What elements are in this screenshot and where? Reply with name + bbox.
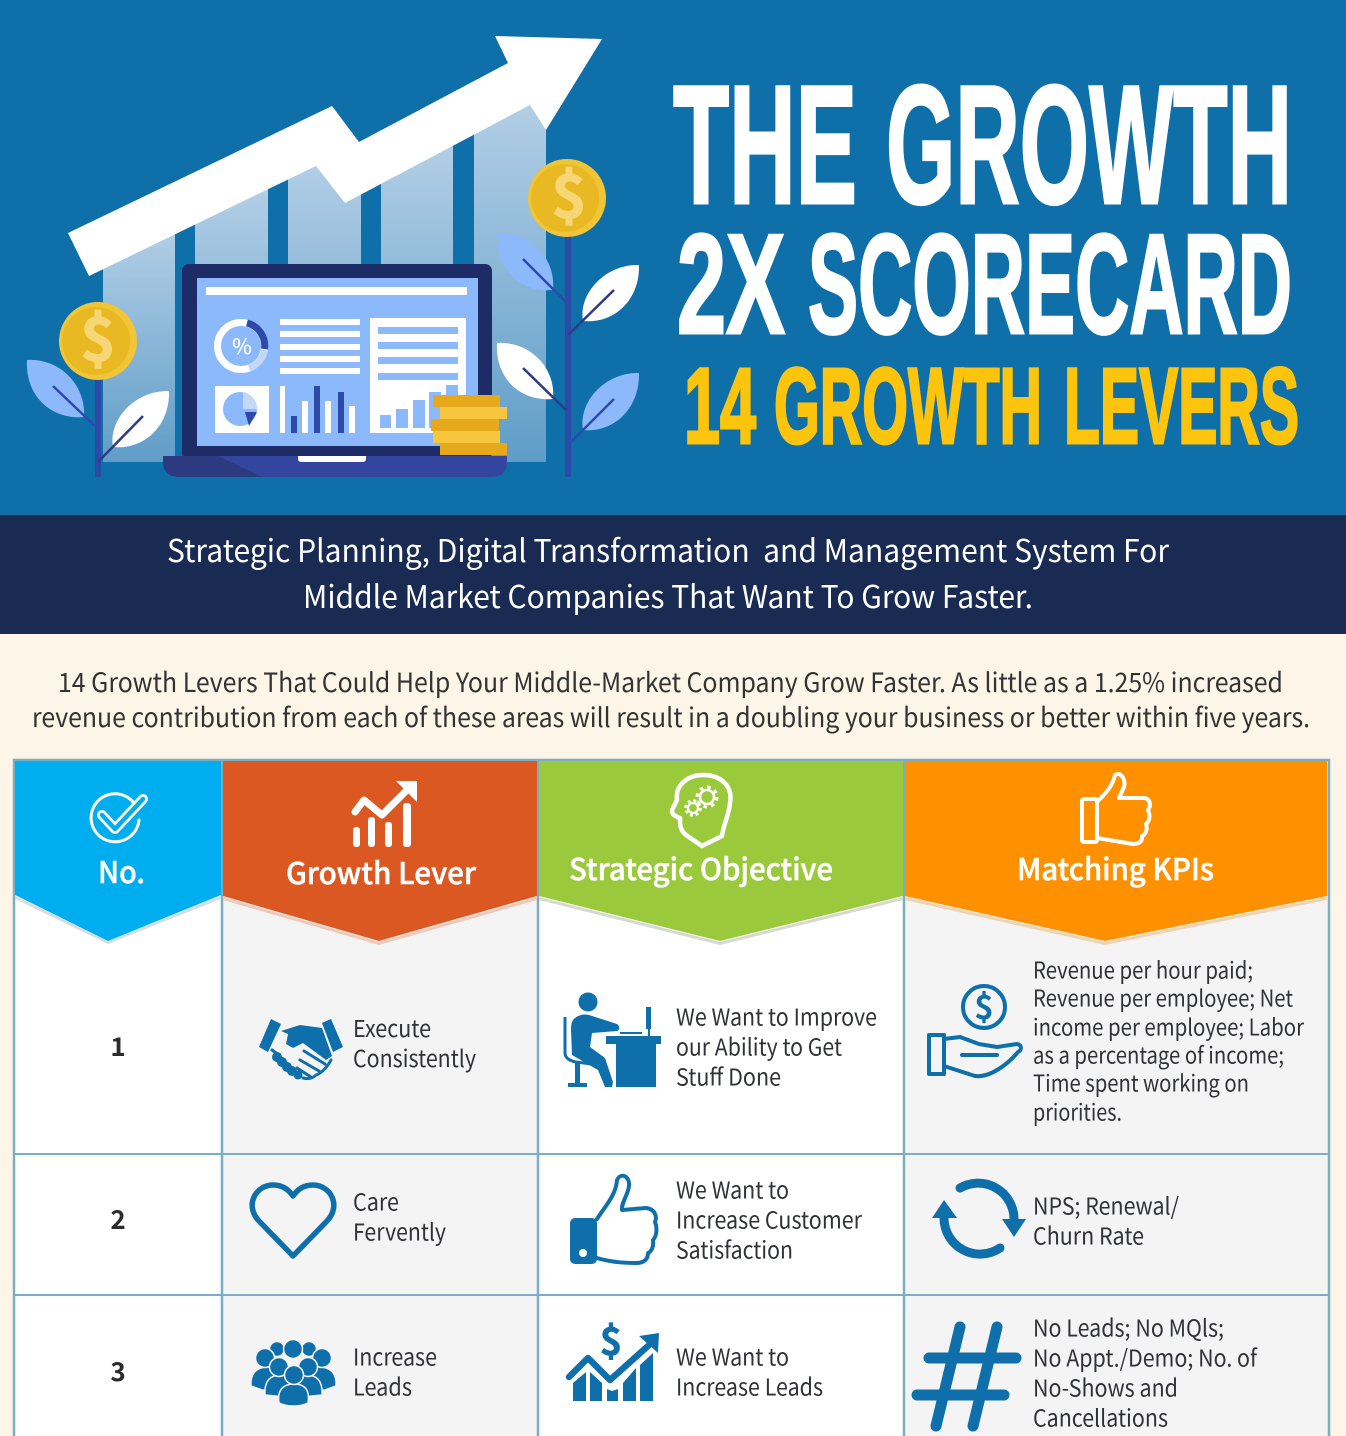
growth lever 2: Fervently <box>353 1214 446 1248</box>
icon: thumbs up <box>570 1176 656 1264</box>
laptop <box>163 264 507 477</box>
title: 14 <box>684 345 756 466</box>
icon: revenue growth chart: $ <box>600 1311 622 1366</box>
header: Strategic Objective <box>539 761 903 945</box>
icon: revenue growth chart <box>569 1311 659 1401</box>
table cell backgrounds <box>13 759 1330 1436</box>
number 2: 2 <box>110 1200 126 1237</box>
objective 2: Increase Customer <box>676 1202 863 1236</box>
KPIs 2: NPS; Renewal/ <box>1033 1188 1179 1222</box>
row 2 <box>110 1172 1179 1266</box>
title: GROWTH <box>774 345 1042 466</box>
KPIs 3: No-Shows and <box>1033 1370 1178 1404</box>
illustration: growth chart and laptop <box>27 36 639 477</box>
icon: hash <box>917 1327 1016 1426</box>
icon: head with gears <box>672 775 730 846</box>
intro text: 14 Growth Levers That Could Help Your Middle-Market Company Grow Faster. As little as a 1.25% increased <box>58 661 1283 700</box>
data panel <box>370 318 466 433</box>
header: No.: No. <box>98 848 145 892</box>
header: Growth Lever <box>223 761 537 945</box>
subtitle band: Strategic Planning, Digital Transformation and Management System For <box>167 526 1170 572</box>
header: Strategic Objective: Strategic Objective <box>569 845 833 889</box>
icon: heart <box>252 1185 334 1256</box>
donut percent widget <box>218 322 265 370</box>
objective 2: Satisfaction <box>676 1232 793 1266</box>
title: THE <box>673 50 857 239</box>
gears <box>686 787 717 816</box>
scorecard table <box>13 759 1330 1436</box>
KPIs 1: Revenue per hour paid; <box>1033 952 1253 986</box>
left plant with coin <box>27 292 169 477</box>
row 3 <box>110 1310 1258 1434</box>
icon: hand holding dollar: $ <box>974 981 994 1029</box>
subtitle band: Middle Market Companies That Want To Grow Faster. <box>303 572 1033 618</box>
KPIs 1: income per employee; Labor <box>1033 1008 1304 1042</box>
row 1 <box>110 952 1304 1128</box>
subtitle band <box>0 515 1346 634</box>
KPIs 1: priorities. <box>1033 1094 1122 1128</box>
KPIs 2: Churn Rate <box>1033 1218 1144 1252</box>
mini bar chart <box>280 386 355 433</box>
KPIs 1: Revenue per employee; Net <box>1033 980 1293 1014</box>
objective 1: We Want to Improve <box>676 998 877 1032</box>
objective 2: We Want to <box>676 1172 789 1206</box>
coin stack <box>431 395 507 455</box>
right plant with coin <box>497 149 639 477</box>
header: Growth Lever: Growth Lever <box>286 849 477 893</box>
objective 3: We Want to <box>676 1338 789 1372</box>
number 3: 3 <box>110 1352 126 1389</box>
title: 2X <box>677 205 785 364</box>
icon: thumbs up outline <box>1082 774 1150 844</box>
intro text <box>32 661 1310 735</box>
header: No. <box>15 761 221 944</box>
KPIs 3: No Leads; No MQls; <box>1033 1310 1224 1344</box>
icon: growth chart <box>353 781 417 847</box>
objective 1: our Ability to Get <box>676 1028 842 1062</box>
icon: check <box>91 794 143 842</box>
left plant with coin: $ <box>80 292 116 379</box>
KPIs 3: Cancellations <box>1033 1400 1168 1434</box>
KPIs 3: No Appt./Demo; No. of <box>1033 1340 1258 1374</box>
growth lever 3: Leads <box>353 1368 412 1402</box>
objective 3: Increase Leads <box>676 1368 823 1402</box>
title <box>673 50 1299 466</box>
cream background <box>0 634 1346 1436</box>
growth lever 2: Care <box>353 1184 399 1218</box>
pie chart widget <box>215 386 269 433</box>
icon: refresh arrows <box>932 1183 1026 1254</box>
right plant with coin: $ <box>551 149 587 236</box>
icon: group of people <box>251 1340 336 1406</box>
big white arrow <box>68 36 602 276</box>
KPIs 1: as a percentage of income; <box>1033 1036 1284 1070</box>
growth lever 1: Execute <box>353 1010 431 1044</box>
header: Matching KPIs <box>905 761 1327 945</box>
header banner <box>0 0 1346 515</box>
chart bars <box>103 100 546 462</box>
icon: handshake <box>259 1019 343 1080</box>
icon: hand holding dollar <box>929 981 1021 1076</box>
icon: person at desk <box>565 992 661 1087</box>
KPIs 1: Time spent working on <box>1033 1064 1249 1098</box>
objective 1: Stuff Done <box>676 1058 781 1092</box>
donut percent widget: % <box>232 331 252 361</box>
header: Matching KPIs: Matching KPIs <box>1017 845 1214 889</box>
number 1: 1 <box>110 1027 126 1064</box>
growth lever 3: Increase <box>353 1338 437 1372</box>
growth lever 1: Consistently <box>353 1040 476 1074</box>
